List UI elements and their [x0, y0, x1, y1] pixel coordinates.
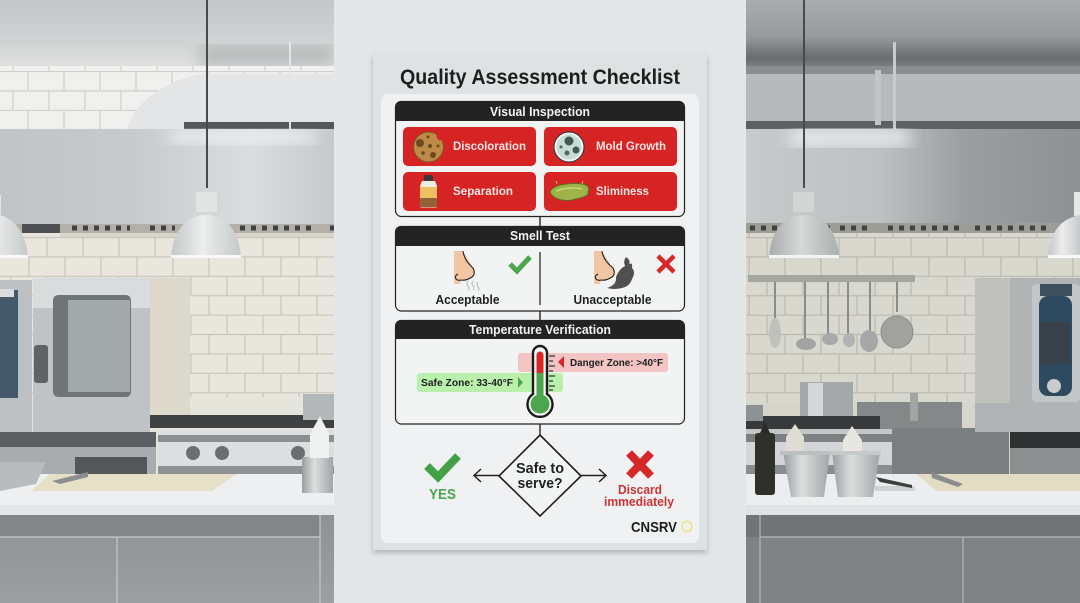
- icon: petri dish: [554, 132, 584, 162]
- label: unacceptable: Unacceptable: [574, 293, 652, 307]
- icon: thermometer: [527, 346, 555, 417]
- card: discoloration: Discoloration: [453, 139, 526, 153]
- icon: nose with light scent: [454, 251, 479, 291]
- header: smell test: Smell Test: [510, 229, 571, 243]
- label: acceptable: Acceptable: [436, 293, 500, 307]
- panel: temperature verification: [395, 320, 685, 424]
- oven left: [0, 278, 190, 433]
- outcome: discard immediately: immediately: [604, 495, 674, 509]
- pot and sink: [746, 382, 1009, 474]
- callout: danger zone: [518, 353, 668, 372]
- pendant lamp right: [769, 0, 839, 258]
- utensil rail: [748, 275, 915, 352]
- icon: green check: [510, 257, 530, 271]
- header: temperature verification: [395, 320, 685, 339]
- panel: smell test: [395, 226, 685, 311]
- arrow: to discard: [581, 469, 606, 482]
- header: smell test: [395, 226, 685, 246]
- outcome: yes: [427, 456, 458, 503]
- card: separation: Separation: [453, 184, 513, 198]
- card: sliminess: [544, 172, 677, 211]
- pendant lamp left: [171, 0, 241, 258]
- outcome: discard immediately: [604, 453, 674, 509]
- arrow: to yes: [474, 469, 499, 482]
- header: visual inspection: [395, 101, 685, 121]
- header: temperature verification: Temperature Verification: [469, 323, 611, 337]
- logo: CNSRV: CNSRV: [631, 519, 677, 536]
- icon: nose with bad odor: [594, 251, 634, 289]
- decision diamond: Safe to: [516, 460, 564, 477]
- card: mold growth: Mold Growth: [596, 139, 666, 153]
- background: left kitchen: [0, 0, 334, 603]
- outcome: yes: YES: [429, 486, 456, 503]
- title: Quality Assessment Checklist: [400, 65, 680, 89]
- card: mold growth: [544, 127, 677, 166]
- icon: slime: [550, 181, 589, 201]
- card: separation: [403, 172, 536, 211]
- icon: cookie: [414, 132, 446, 162]
- poster: [373, 53, 707, 550]
- inner card: [381, 94, 699, 543]
- header: visual inspection: Visual Inspection: [490, 105, 590, 119]
- pendant lamp far left: [0, 195, 28, 258]
- pendant lamp far right: [1048, 192, 1080, 258]
- wall column: [334, 0, 746, 603]
- icon: red cross: [658, 256, 674, 272]
- oven right: [975, 278, 1080, 474]
- callout: danger zone: Danger Zone: >40°F: [570, 357, 664, 369]
- callout: safe zone: Safe Zone: 33-40°F: [421, 377, 514, 389]
- bottles and steel cups: [755, 422, 881, 497]
- outcome: discard immediately: Discard: [618, 483, 662, 497]
- stove: [158, 430, 334, 474]
- cabinets: [0, 515, 334, 603]
- background: right kitchen: [746, 0, 1080, 603]
- icon: bottle: [420, 175, 437, 208]
- decision diamond: [499, 435, 581, 516]
- panel: visual inspection: [395, 101, 685, 216]
- counter right: [746, 474, 1080, 515]
- counter: [0, 474, 334, 515]
- card: discoloration: [403, 127, 536, 166]
- decision diamond: serve?: [518, 475, 562, 492]
- callout: safe zone: [417, 373, 563, 392]
- card: sliminess: Sliminess: [596, 184, 649, 198]
